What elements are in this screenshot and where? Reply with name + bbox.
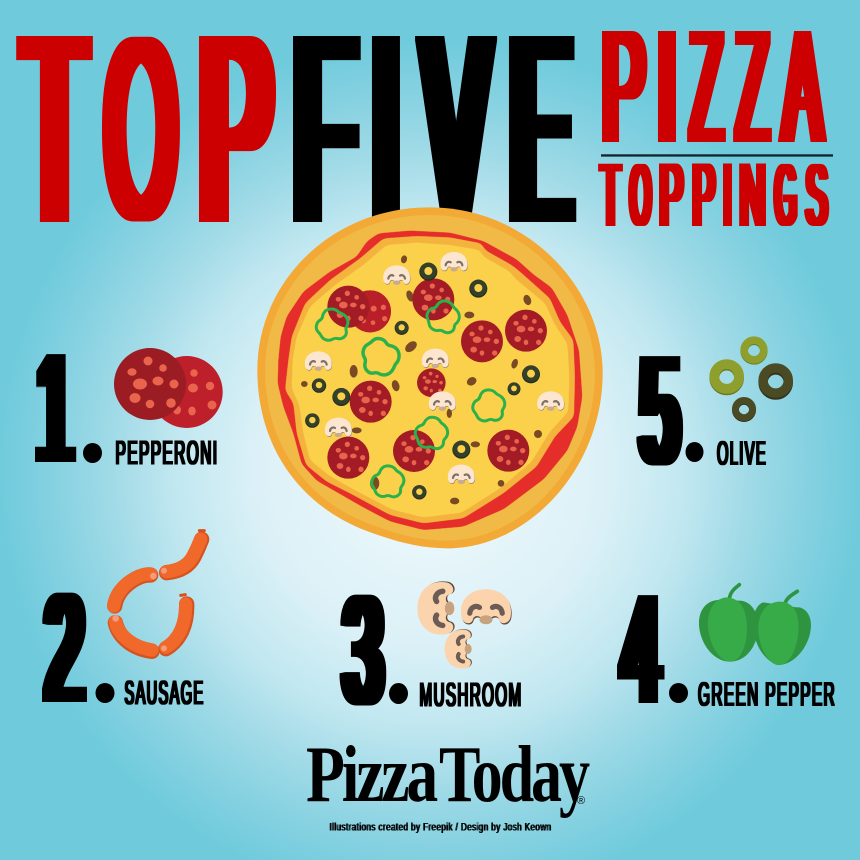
infographic canvas: MUSHROOM [420,676,522,713]
number 3 [344,566,408,734]
icon: green peppers [699,585,811,665]
number 5 [641,326,704,494]
pizza illustration [257,207,603,548]
subtitle: TOPPINGS: P [693,146,715,245]
number 3: . [397,671,405,704]
green pepper rings [316,296,506,500]
subtitle: TOPPINGS: S [806,146,827,243]
item 3: mushroom [344,566,522,734]
infographic canvas: PEPPERONI [116,434,218,471]
number 2 [46,563,114,732]
item 5: olive [641,326,788,494]
subtitle: PIZZA: A [783,0,822,176]
subtitle: TOPPINGS [601,146,827,245]
item 2: sausage [46,531,204,732]
word: TOP [24,0,272,277]
subtitle: TOPPINGS: T [601,147,620,245]
word: FIVE [295,0,570,277]
number 1: . [91,430,99,463]
subtitle: PIZZA: I [656,0,677,175]
number 2: 2 [46,563,83,732]
subtitle: TOPPINGS: P [660,147,683,245]
subtitle: TOPPINGS: O [630,147,651,243]
sausage bits [301,255,542,504]
icon: pepperoni [114,348,223,428]
number 3: 3 [344,566,382,734]
subtitle: PIZZA: Z [737,0,768,175]
subtitle: TOPPINGS: G [775,146,796,243]
number 5: 5 [641,326,679,494]
subtitle: TOPPINGS: N [740,147,765,245]
number 4: . [677,670,685,703]
icon: mushrooms [417,581,512,668]
number 4 [622,564,688,733]
icon: olives [714,340,788,419]
number 5: . [693,429,701,462]
pepperoni slices [327,278,547,479]
item 4: green pepper [622,564,836,733]
mushroom slices [305,252,564,484]
logo: Pizza Today [306,731,590,819]
number 1: 1 [37,323,72,493]
logo: Pizza Today: Today [439,731,590,819]
number 2: . [104,670,112,703]
melted cheese [292,243,569,517]
olive slices [305,263,540,499]
subtitle: TOPPINGS: I [724,146,731,245]
title: TOP FIVE [24,0,570,277]
crust [257,207,603,548]
cheese edge [285,236,575,523]
credit line: Illustrations created by Freepik / Design by Josh Keown [330,822,552,834]
infographic canvas: SAUSAGE [124,674,204,711]
subtitle: PIZZA: Z [691,0,722,175]
item 1: pepperoni [37,323,223,493]
icon: sausage links [112,531,204,651]
logo: Pizza Today: Pizza [306,731,437,819]
number 1 [37,323,102,493]
tomato sauce [278,231,582,530]
subtitle: PIZZA: P [602,0,645,175]
subtitle: PIZZA [602,0,822,176]
item 5: olive: OLIVE [717,434,767,472]
number 4: 4 [622,564,659,733]
logo: Pizza Today: ® [577,795,585,807]
